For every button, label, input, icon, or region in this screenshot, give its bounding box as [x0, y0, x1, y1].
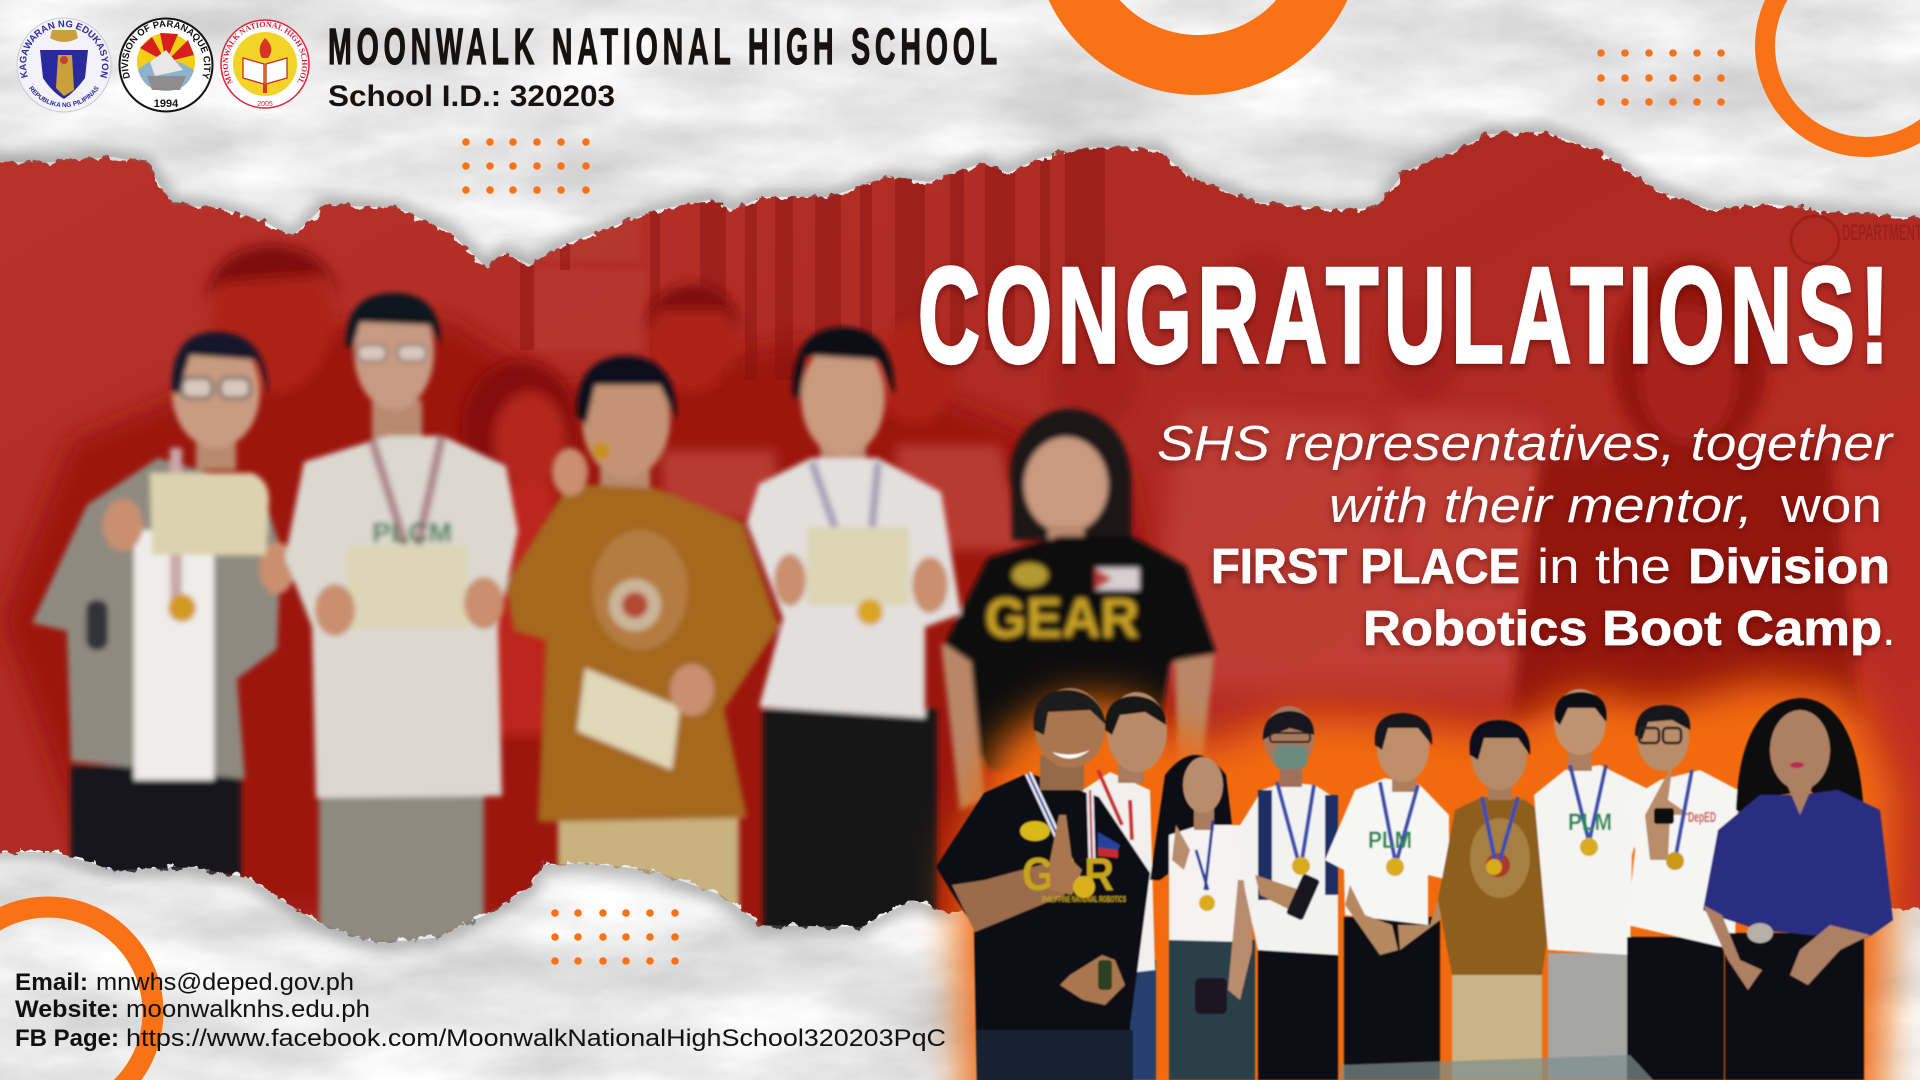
line 3: Division	[1688, 540, 1890, 594]
facebook page: https://www.facebook.com/MoonwalkNationalHighSchool320203PqC	[126, 1025, 946, 1052]
dot grid top right	[1597, 49, 1725, 106]
photo: team with medals	[936, 688, 1893, 1080]
woman in blue blouse	[1703, 698, 1893, 1080]
line 4: .	[1882, 602, 1896, 656]
torn edge shading	[0, 852, 950, 943]
line 1: SHS representatives, together	[1157, 417, 1894, 471]
dot grid bottom	[551, 909, 679, 965]
line 2: won	[1780, 479, 1882, 533]
logo: Moonwalk NHS seal: MOONWALK NATIONAL HIGH SCHOOL	[222, 22, 308, 85]
boy with mask	[1237, 706, 1338, 1080]
glass table	[1341, 1055, 1653, 1080]
facebook page: FB Page:	[15, 1025, 119, 1052]
boy with glasses, hand on chin: DepED	[1688, 809, 1716, 826]
email: mnwhs@deped.gov.ph	[96, 969, 354, 996]
line 2: with their mentor,	[1329, 479, 1753, 533]
email: Email:	[15, 969, 88, 996]
logo: Division of Paranaque City seal: DIVISION OF PARAÑAQUE CITY	[121, 20, 211, 80]
person 5: mentor in black GEAR shirt: GEAR	[985, 586, 1139, 649]
boy with PLCM shirt: PLM	[1368, 827, 1412, 854]
person 4: white shirt	[747, 327, 961, 934]
dot grid top centre	[462, 138, 590, 194]
boy with glasses, hand on chin	[1627, 705, 1738, 1080]
bottom torn paper	[0, 852, 1920, 1080]
ghost figure: glasses boy	[645, 283, 780, 520]
logo: Kagawaran ng Edukasyon seal: KAGAWARAN NG EDUKASYON	[20, 20, 109, 78]
ghost figure: woman	[462, 360, 578, 735]
background: ghost team photo in red	[205, 245, 1025, 735]
boy with brown shirt	[1438, 720, 1578, 1080]
coach in black GEAR shirt: PHILIPPINE NATIONAL ROBOTICS	[1042, 895, 1126, 904]
orange ring top centre	[1063, 0, 1333, 65]
tall boy with PLCM shirt: PLM	[1568, 809, 1612, 836]
line 3: FIRST PLACE	[1211, 540, 1520, 594]
school name heading: MOONWALK NATIONAL HIGH SCHOOL	[328, 18, 997, 75]
logo: Moonwalk NHS seal: 2005	[257, 101, 273, 108]
ghost figure: boy right of centre	[875, 320, 1025, 550]
logo: Division of Paranaque City seal	[118, 18, 214, 112]
main title: CONGRATULATIONS!	[918, 240, 1889, 392]
coach in black GEAR shirt: GAR	[1022, 848, 1114, 900]
school ID: School I.D.: 320203	[328, 80, 615, 113]
website: moonwalknhs.edu.ph	[126, 996, 370, 1023]
ghost shirts right side	[1150, 410, 1560, 690]
logo: Kagawaran ng Edukasyon seal: REPUBLIKA NG PILIPINAS	[29, 86, 98, 108]
boy 2 behind coach	[1083, 692, 1167, 1080]
ghost woman right	[1510, 260, 1860, 720]
line 4: Robotics Boot Camp	[1363, 602, 1882, 656]
website: Website:	[15, 996, 119, 1023]
boy with PLCM shirt	[1325, 713, 1450, 1080]
person 3: brown printed shirt	[506, 356, 779, 908]
orange ring bottom left	[0, 907, 153, 1080]
torn edge shading	[0, 132, 1920, 268]
background: window panes and curtain stripes	[520, 140, 1105, 410]
coach in black GEAR shirt	[936, 688, 1150, 1080]
person 2: PLCM shirt	[285, 293, 518, 946]
contact details	[15, 969, 946, 1052]
photo: five award recipients	[32, 293, 1216, 946]
ghost figure: man	[205, 245, 340, 394]
logo: Kagawaran ng Edukasyon seal	[16, 18, 112, 112]
wall sign text in background	[1791, 216, 1920, 264]
person 2: PLCM shirt: PLCM	[372, 517, 452, 548]
announcement text	[1157, 417, 1896, 656]
person 1: grey cardigan	[32, 332, 295, 876]
logo: Division of Paranaque City seal: 1994	[154, 98, 179, 110]
tall boy with PLCM shirt	[1534, 689, 1650, 1080]
girl with long hair	[1150, 755, 1255, 1080]
top torn paper	[0, 0, 1920, 268]
ghost heads right	[1050, 252, 1462, 430]
orange glow behind team photo	[955, 680, 1895, 1080]
dark halo behind left group	[0, 320, 1180, 940]
orange ring top right	[1765, 0, 1920, 147]
line 3: in the	[1537, 540, 1671, 594]
person 5: mentor in black GEAR shirt	[941, 409, 1216, 810]
